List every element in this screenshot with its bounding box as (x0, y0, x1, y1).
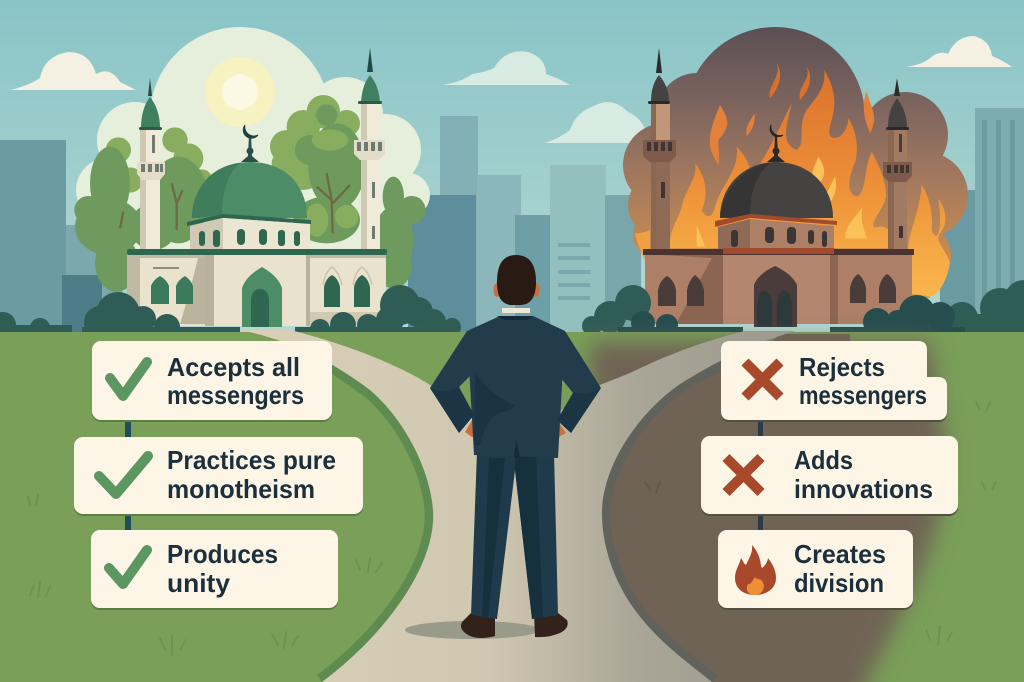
trees (74, 95, 426, 292)
scorched ground (590, 342, 946, 682)
panel: burning mosque scene (623, 27, 968, 327)
connector pole (125, 418, 131, 533)
card: adds innovations: Adds (794, 445, 853, 475)
jacket (430, 316, 601, 458)
collar (502, 308, 530, 313)
card: produces unity (91, 530, 338, 610)
ground shadow (405, 621, 539, 639)
left road green edge (300, 347, 433, 682)
panel: negative traits (701, 341, 958, 610)
man in suit facing the fork (405, 255, 601, 639)
card: rejects messengers: messengers (799, 380, 927, 410)
card: produces unity: unity (167, 568, 231, 598)
burnt mosque base (643, 248, 914, 327)
card: creates division: Creates (794, 539, 886, 569)
right road dark edge (602, 360, 725, 682)
trousers (471, 452, 558, 619)
dome (187, 162, 311, 249)
left minaret (137, 78, 165, 250)
left burnt minaret (643, 48, 676, 250)
panel: positive traits (74, 341, 363, 610)
card: rejects messengers: Rejects (799, 352, 885, 382)
card: accepts all messengers: messengers (167, 380, 304, 410)
sun (205, 57, 275, 127)
right minaret (354, 48, 385, 250)
flames (635, 63, 950, 297)
smoke cloud (623, 27, 968, 298)
connector pole (758, 418, 763, 533)
card: rejects messengers (721, 341, 947, 422)
icon: flame (735, 545, 776, 595)
hands (465, 415, 566, 438)
card: practices pure monotheism: Practices pure (167, 445, 336, 475)
grass field (0, 332, 1024, 682)
crescent finial (241, 125, 259, 162)
scorched ground near road (600, 334, 850, 682)
pale glow cloud behind mosque (76, 27, 430, 250)
dark crescent finial (767, 125, 785, 162)
mosque base (127, 249, 387, 327)
forked road (240, 330, 795, 682)
dark dome (715, 162, 837, 249)
card: practices pure monotheism: monotheism (167, 474, 315, 504)
sky background (0, 0, 1024, 340)
city skyline (0, 108, 1024, 336)
grass tufts (28, 402, 996, 655)
bushes (0, 280, 1024, 340)
shoes (461, 613, 568, 638)
card: creates division (718, 530, 913, 610)
head (494, 255, 540, 305)
card: creates division: division (794, 568, 884, 598)
clouds (10, 36, 1012, 143)
panel: green mosque scene (74, 27, 430, 327)
right burnt minaret (883, 78, 912, 250)
card: produces unity: Produces (167, 539, 278, 569)
card: accepts all messengers (92, 341, 332, 422)
card: adds innovations: innovations (794, 474, 933, 504)
card: practices pure monotheism (74, 437, 363, 516)
card: adds innovations (701, 436, 958, 516)
card: accepts all messengers: Accepts all (167, 352, 300, 382)
